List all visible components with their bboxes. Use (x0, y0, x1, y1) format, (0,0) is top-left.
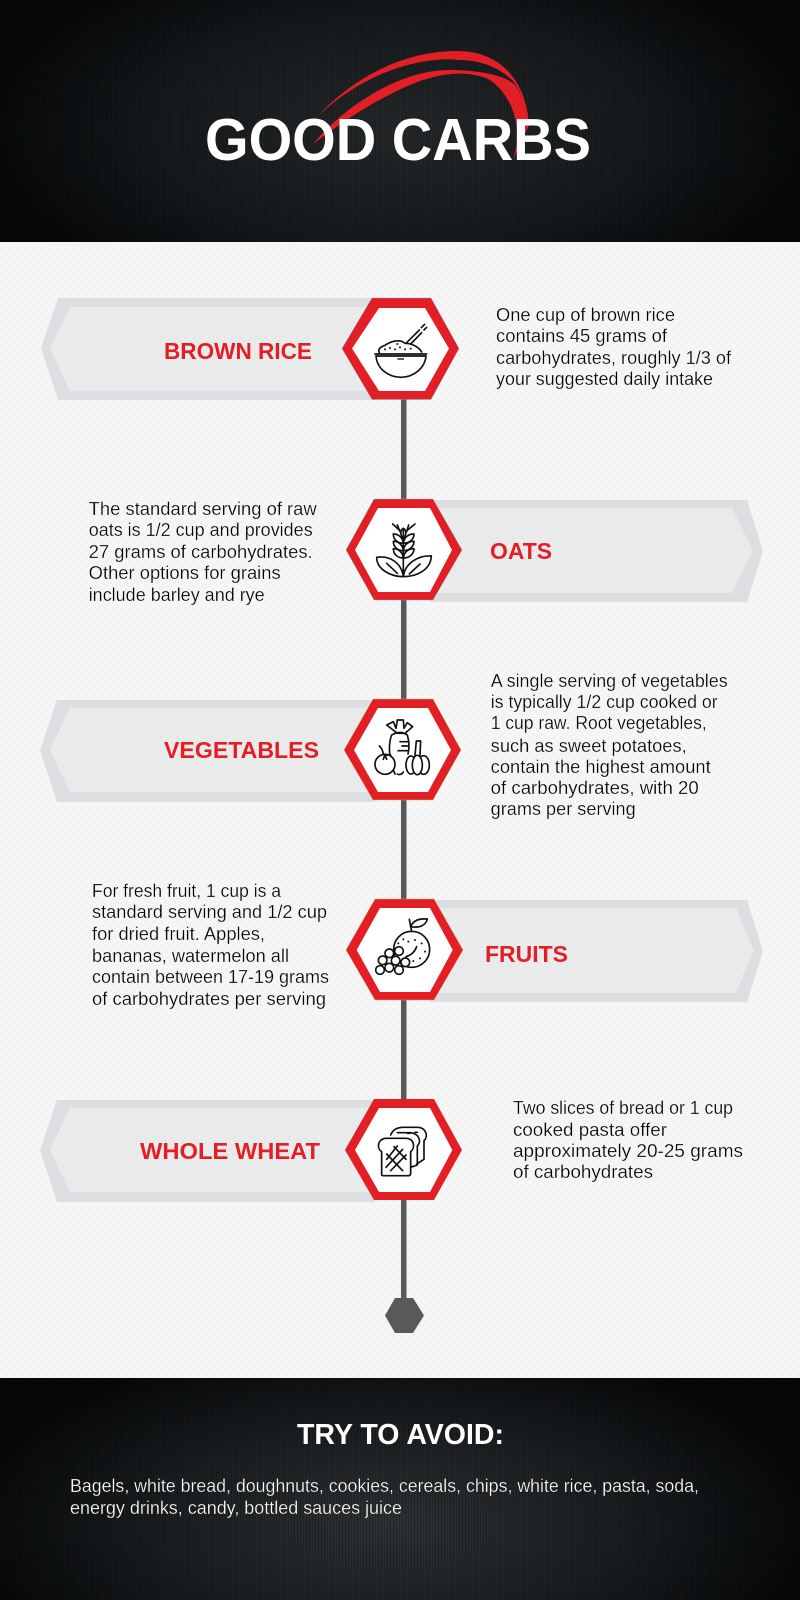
item: whole wheat (40, 1098, 743, 1202)
ribbon: brown rice (41, 298, 375, 400)
description: oats: Other options for grains (89, 563, 281, 583)
description: vegetables: is typically 1/2 cup cooked or (491, 692, 718, 712)
description: brown rice: contains 45 grams of (496, 326, 668, 346)
description: vegetables: contain the highest amount (491, 757, 711, 777)
heading: oats: OATS (490, 538, 552, 564)
ribbon: fruits (430, 900, 763, 1002)
description: vegetables (491, 671, 728, 819)
icon: wheat plant (377, 524, 431, 577)
description: fruits: standard serving and 1/2 cup (92, 902, 327, 922)
description: oats (89, 499, 318, 605)
description: whole wheat: approximately 20-25 grams (513, 1141, 743, 1161)
description: fruits: of carbohydrates per serving (92, 989, 326, 1009)
description: vegetables: A single serving of vegetables (491, 671, 728, 691)
red swoosh (313, 51, 529, 162)
header panel (0, 0, 800, 242)
footer text: energy drinks, candy, bottled sauces juice (70, 1498, 402, 1518)
timeline end hexagon (385, 1298, 424, 1333)
description: fruits (92, 881, 329, 1009)
icon: vegetables (375, 720, 429, 775)
description: fruits: For fresh fruit, 1 cup is a (92, 881, 282, 901)
ribbon: vegetables (40, 700, 375, 802)
description: oats: include barley and rye (89, 585, 265, 605)
description: fruits: contain between 17-19 grams (92, 967, 329, 987)
heading: whole wheat: WHOLE WHEAT (140, 1138, 320, 1164)
icon: rice bowl (375, 324, 427, 377)
description: brown rice: carbohydrates, roughly 1/3 of (496, 348, 732, 368)
description: oats: 27 grams of carbohydrates. (89, 542, 313, 562)
ribbon: whole wheat (40, 1100, 375, 1202)
description: vegetables: of carbohydrates, with 20 (491, 778, 699, 798)
footer text (70, 1476, 699, 1518)
description: whole wheat: Two slices of bread or 1 cup (513, 1098, 733, 1118)
hexagon: whole wheat (345, 1099, 462, 1200)
description: whole wheat (513, 1098, 743, 1182)
timeline line (401, 395, 406, 1300)
description: fruits: bananas, watermelon all (92, 946, 289, 966)
heading: fruits: FRUITS (485, 941, 568, 967)
heading: vegetables: VEGETABLES (164, 737, 319, 763)
description: vegetables: grams per serving (491, 799, 636, 819)
description: fruits: for dried fruit. Apples, (92, 924, 265, 944)
ribbon: oats (430, 500, 763, 602)
footer text: Bagels, white bread, doughnuts, cookies, cereals, chips, white rice, pasta, soda, (70, 1476, 699, 1496)
description: brown rice: your suggested daily intake (496, 369, 713, 389)
title: GOOD CARBS (205, 107, 591, 173)
hexagon: vegetables (344, 699, 461, 800)
item: fruits (92, 881, 763, 1009)
description: brown rice (496, 305, 732, 389)
item: vegetables (40, 671, 728, 819)
heading: brown rice: BROWN RICE (164, 338, 312, 364)
description: vegetables: 1 cup raw. Root vegetables, (491, 713, 707, 733)
description: whole wheat: cooked pasta offer (513, 1120, 667, 1140)
description: brown rice: One cup of brown rice (496, 305, 675, 325)
description: oats: oats is 1/2 cup and provides (89, 520, 313, 540)
item: oats (89, 499, 763, 605)
panel: main light background (0, 242, 800, 1378)
description: vegetables: such as sweet potatoes, (491, 736, 687, 756)
hexagon: fruits (346, 899, 463, 1000)
icon: orange and grapes (376, 919, 430, 974)
icon: bread slices (378, 1127, 426, 1176)
hexagon: brown rice (342, 298, 459, 400)
footer panel (0, 1378, 800, 1600)
hexagon: oats (346, 499, 462, 600)
description: oats: The standard serving of raw (89, 499, 318, 519)
item: brown rice (41, 298, 732, 400)
footer heading: TRY TO AVOID: (297, 1419, 504, 1451)
description: whole wheat: of carbohydrates (513, 1162, 653, 1182)
